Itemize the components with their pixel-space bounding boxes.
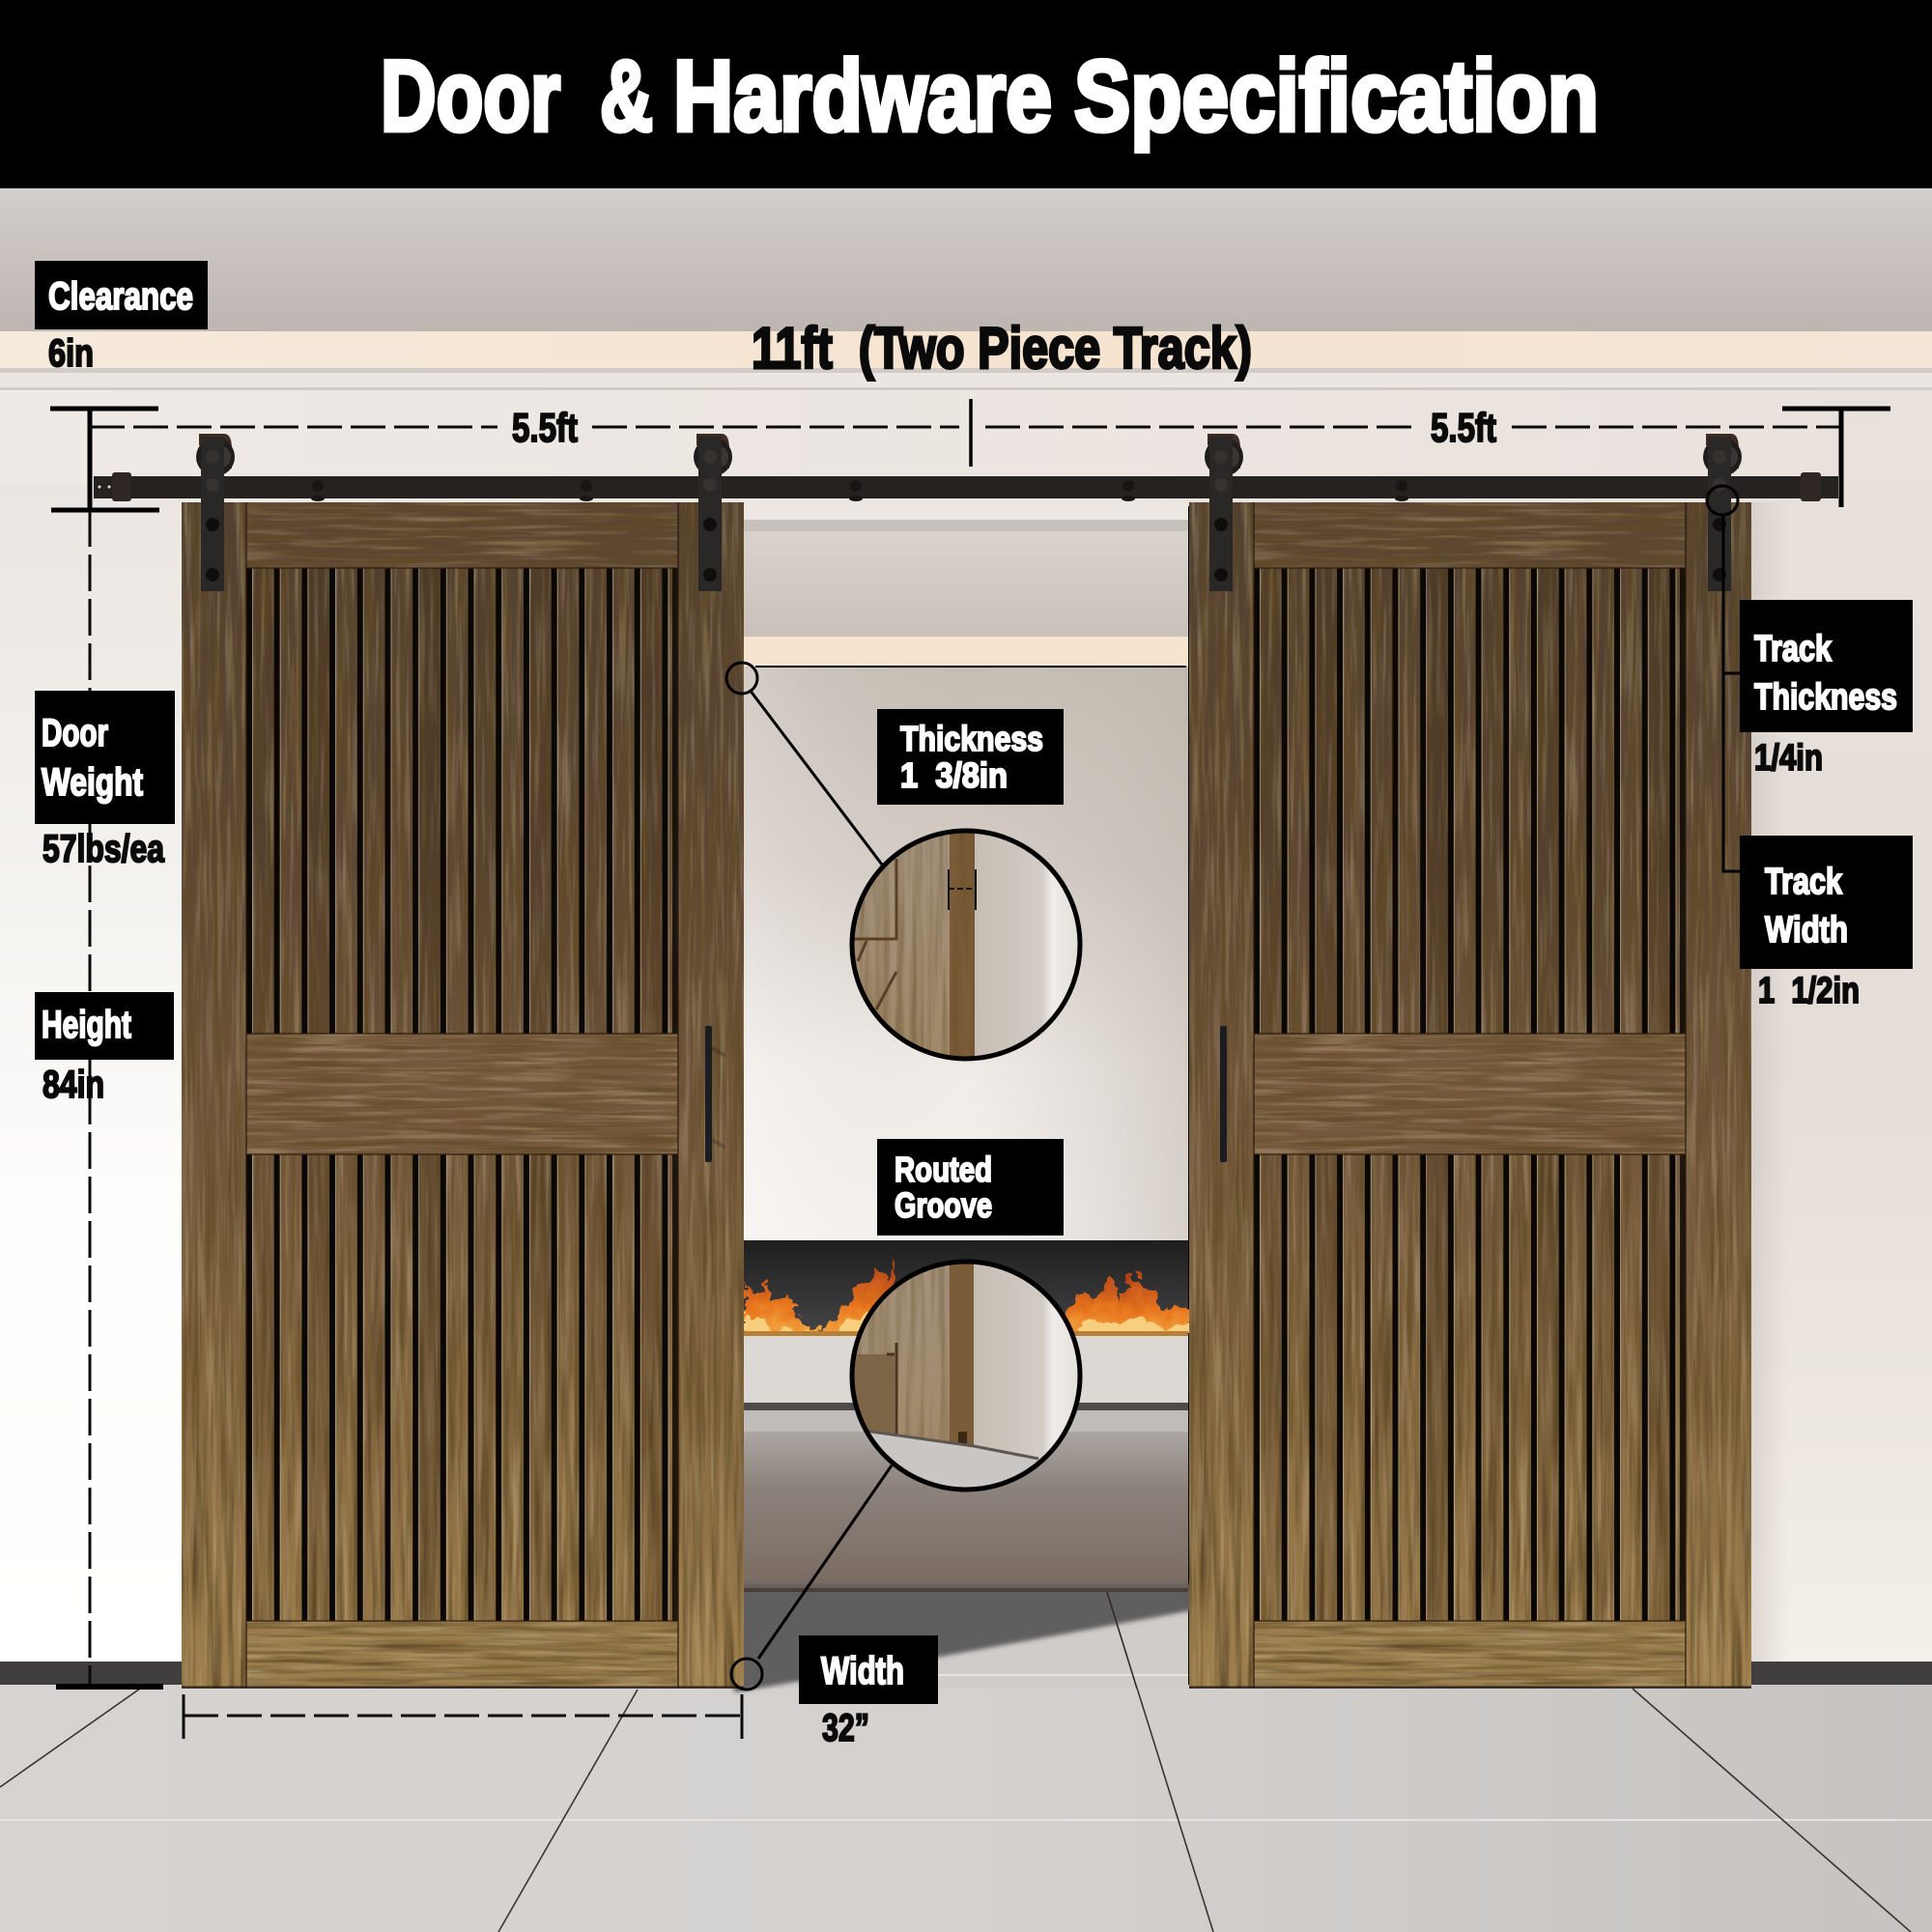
track bracket left bbox=[50, 409, 159, 510]
track width label: Width bbox=[1765, 910, 1848, 951]
track end holes bbox=[99, 485, 110, 489]
title: Door bbox=[381, 41, 560, 153]
track thickness label: 1/4in bbox=[1754, 738, 1823, 779]
hanger 3 bbox=[1205, 434, 1243, 591]
thickness label: 1 3/8in bbox=[900, 755, 1008, 795]
left door bbox=[182, 502, 744, 1689]
track leader lines bbox=[1707, 486, 1740, 871]
opening floor bbox=[744, 1592, 1188, 1689]
thickness label bbox=[877, 709, 1064, 805]
ceiling trim bbox=[0, 368, 1932, 390]
track thickness label: Thickness bbox=[1754, 677, 1897, 718]
cove light strip bbox=[0, 331, 1932, 368]
header banner bbox=[0, 0, 1932, 188]
floor shadow bbox=[734, 1584, 1198, 1692]
upper wall bbox=[0, 390, 1932, 506]
height dimension line bbox=[56, 510, 163, 1687]
thickness label: Thickness bbox=[900, 719, 1043, 758]
routed groove label bbox=[877, 1139, 1064, 1236]
height label bbox=[35, 992, 174, 1106]
wall shadow bbox=[1751, 502, 1788, 1663]
door weight label bbox=[35, 691, 175, 870]
right door handle bbox=[1220, 1026, 1227, 1162]
track screws bbox=[311, 480, 1408, 501]
magnifier: door thickness bbox=[850, 829, 1083, 1061]
routed groove label: Routed bbox=[895, 1150, 992, 1189]
door weight label: 57lbs/ea bbox=[43, 828, 165, 870]
track thickness label: Track bbox=[1754, 629, 1833, 669]
right section dimension: 5.5ft bbox=[1431, 405, 1496, 450]
baseboard bbox=[0, 1662, 1932, 1685]
thickness pointer bbox=[726, 663, 1186, 865]
floor bbox=[0, 1592, 1932, 1932]
door width dimension bbox=[184, 1694, 742, 1739]
width label: 32” bbox=[822, 1707, 869, 1749]
room seen through opening bbox=[734, 502, 1198, 1692]
left wall bbox=[0, 483, 184, 1663]
left section dimension: 5.5ft bbox=[512, 405, 578, 450]
track bracket right bbox=[1782, 409, 1890, 507]
ceiling bbox=[0, 188, 1932, 331]
right track stop bbox=[1801, 472, 1821, 501]
door weight label: Door bbox=[42, 712, 108, 754]
track width label bbox=[1740, 836, 1913, 1011]
fireplace bbox=[744, 1240, 1193, 1338]
width label: Width bbox=[821, 1650, 904, 1692]
title: Hardware bbox=[673, 41, 1052, 153]
clearance label bbox=[35, 261, 208, 375]
routed groove label: Groove bbox=[895, 1185, 992, 1225]
left door handle bbox=[705, 1026, 725, 1162]
height label: Height bbox=[42, 1004, 131, 1046]
width pointer bbox=[731, 1465, 892, 1690]
title: & bbox=[600, 41, 653, 153]
hanger 1 bbox=[196, 434, 235, 591]
clearance label: Clearance bbox=[48, 275, 193, 318]
track thickness label bbox=[1740, 600, 1913, 779]
height label: 84in bbox=[43, 1064, 104, 1106]
door weight label: Weight bbox=[42, 761, 143, 804]
hanger 2 bbox=[694, 434, 732, 591]
title: Specification bbox=[1074, 41, 1599, 153]
title bbox=[381, 41, 1599, 153]
center tick bbox=[969, 399, 973, 467]
width label bbox=[799, 1635, 938, 1749]
track width label: 1 1/2in bbox=[1758, 971, 1860, 1011]
magnifier: routed groove bbox=[850, 1260, 1084, 1492]
track width label: Track bbox=[1765, 862, 1843, 902]
clearance label: 6in bbox=[48, 332, 94, 375]
track length label: 11ft (Two Piece Track) bbox=[752, 316, 1252, 381]
left track stop bbox=[112, 472, 131, 501]
hanger 4 bbox=[1703, 434, 1742, 591]
track rail bbox=[94, 476, 1838, 498]
right wall bbox=[1748, 483, 1932, 1663]
right door bbox=[1189, 502, 1751, 1689]
